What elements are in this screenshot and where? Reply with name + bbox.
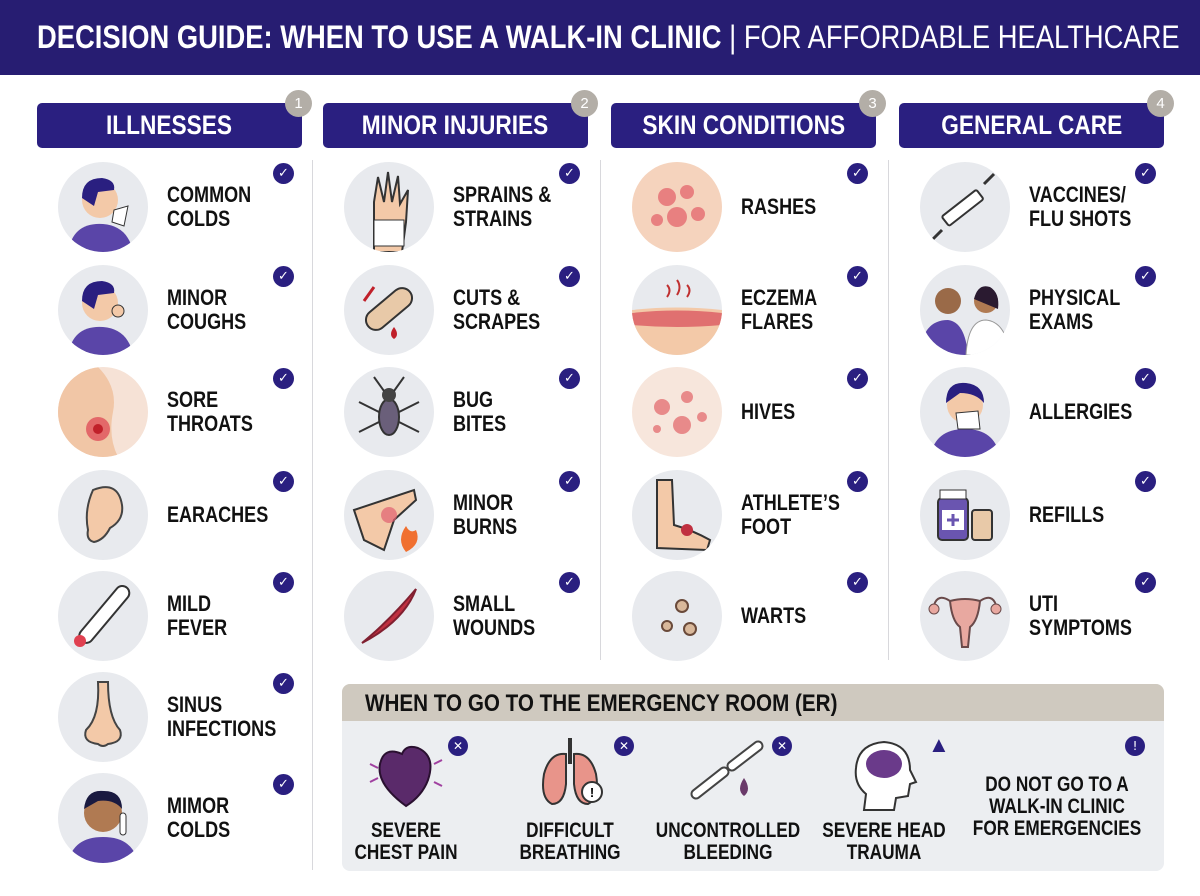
item: mild fever: FEVER [167, 615, 227, 640]
er item: uncontrolled bleeding [656, 736, 800, 864]
item: mimor colds: COLDS [167, 817, 230, 842]
panel: skin conditions [632, 162, 868, 661]
heading: er [342, 684, 1164, 721]
item: sinus infections [58, 672, 294, 762]
item: refills: ✓ [1140, 474, 1151, 489]
item: sore throats: SORE [167, 387, 218, 412]
item: sinus infections: ✓ [278, 676, 289, 691]
er item: difficult breathing: ✕ [619, 739, 629, 753]
item: hives: ✓ [852, 371, 863, 386]
header: illnesses: 1 [294, 95, 303, 112]
header: general care: GENERAL CARE [941, 110, 1122, 140]
er item: difficult breathing: BREATHING [519, 841, 621, 864]
item: minor burns [344, 470, 580, 560]
item: mimor colds: MIMOR [167, 793, 229, 818]
er item: uncontrolled bleeding: ✕ [777, 739, 787, 753]
item: common colds: COLDS [167, 206, 230, 231]
item: eczema flares: ✓ [852, 269, 863, 284]
item: small wounds [344, 571, 580, 661]
item: uti symptoms: UTI [1029, 591, 1058, 616]
item: warts [632, 571, 868, 661]
header: minor injuries: MINOR INJURIES [362, 110, 549, 140]
item: rashes: RASHES [741, 194, 816, 219]
item: allergies [920, 367, 1156, 457]
er item: severe head trauma: ▲ [928, 732, 950, 757]
item: refills: REFILLS [1029, 502, 1104, 527]
item: common colds: COMMON [167, 182, 251, 207]
header: illnesses [37, 103, 302, 148]
er note [973, 736, 1145, 840]
item: sore throats: THROATS [167, 411, 253, 436]
header: minor injuries: 2 [580, 95, 589, 112]
item: eczema flares: ECZEMA [741, 285, 817, 310]
item: hives: HIVES [741, 399, 795, 424]
item: small wounds: WOUNDS [453, 615, 535, 640]
item: cuts & scrapes: SCRAPES [453, 309, 540, 334]
header: skin conditions: 3 [868, 95, 877, 112]
item: uti symptoms: SYMPTOMS [1029, 615, 1132, 640]
er item: severe chest pain: SEVERE [371, 819, 441, 842]
item: vaccines: ✓ [1140, 166, 1151, 181]
er note: FOR EMERGENCIES [973, 817, 1141, 840]
item: sprains & strains [344, 162, 580, 252]
item: sprains & strains: SPRAINS & [453, 182, 551, 207]
heading: er: WHEN TO GO TO THE EMERGENCY ROOM (ER) [365, 690, 837, 717]
item: warts: WARTS [741, 603, 806, 628]
item: refills [920, 470, 1156, 560]
item: hives [632, 367, 868, 457]
header: illnesses: ILLNESSES [106, 110, 233, 140]
item: physical exams [920, 265, 1156, 355]
item: physical exams: ✓ [1140, 269, 1151, 284]
item: sore throats [58, 367, 294, 457]
item: minor burns: BURNS [453, 514, 517, 539]
er item: severe chest pain [354, 736, 468, 864]
item: eczema flares: FLARES [741, 309, 813, 334]
header: skin conditions: SKIN CONDITIONS [642, 110, 845, 140]
item: earaches: ✓ [278, 474, 289, 489]
item: bug bites [344, 367, 580, 457]
item: athlete's foot: FOOT [741, 514, 791, 539]
item: sprains & strains: ✓ [564, 166, 575, 181]
er item: severe chest pain: ✕ [453, 739, 463, 753]
item: minor coughs: ✓ [278, 269, 289, 284]
item: mild fever: MILD [167, 591, 211, 616]
panel: minor injuries [344, 162, 580, 661]
item: rashes: ✓ [852, 166, 863, 181]
item: small wounds: ✓ [564, 575, 575, 590]
item: athlete's foot [632, 470, 868, 560]
item: cuts & scrapes: ✓ [564, 269, 575, 284]
item: physical exams: PHYSICAL [1029, 285, 1120, 310]
er note: ! [1133, 739, 1137, 753]
item: sinus infections: SINUS [167, 692, 222, 717]
er item: difficult breathing: DIFFICULT [526, 819, 614, 842]
item: warts: ✓ [852, 575, 863, 590]
item: common colds [58, 162, 294, 252]
item: minor burns: MINOR [453, 490, 513, 515]
er note: DO NOT GO TO A [985, 773, 1129, 796]
item: vaccines: FLU SHOTS [1029, 206, 1131, 231]
item: athlete's foot: ✓ [852, 474, 863, 489]
item: sprains & strains: STRAINS [453, 206, 532, 231]
er item: uncontrolled bleeding: UNCONTROLLED [656, 819, 800, 842]
item: allergies: ✓ [1140, 371, 1151, 386]
item: minor coughs: COUGHS [167, 309, 246, 334]
er note: WALK-IN CLINIC [989, 795, 1125, 818]
item: vaccines: VACCINES/ [1029, 182, 1126, 207]
item: common colds: ✓ [278, 166, 289, 181]
er item: difficult breathing: ! [590, 785, 594, 800]
item: eczema flares [632, 265, 868, 355]
item: athlete's foot: ATHLETE’S [741, 490, 840, 515]
item: vaccines [920, 162, 1156, 252]
header: general care [899, 103, 1164, 148]
title [0, 0, 1200, 75]
item: small wounds: SMALL [453, 591, 515, 616]
header: skin conditions [611, 103, 876, 148]
item: mimor colds [58, 773, 294, 863]
item: earaches [58, 470, 294, 560]
header: general care: 4 [1156, 95, 1165, 112]
er item: severe head trauma: TRAUMA [847, 841, 921, 864]
item: allergies: ALLERGIES [1029, 399, 1132, 424]
item: mild fever [58, 571, 294, 661]
item: minor burns: ✓ [564, 474, 575, 489]
item: mild fever: ✓ [278, 575, 289, 590]
item: sore throats: ✓ [278, 371, 289, 386]
er item: severe head trauma [822, 732, 950, 864]
header: minor injuries [323, 103, 588, 148]
item: earaches: EARACHES [167, 502, 268, 527]
panel: emergency room [342, 684, 1164, 871]
item: physical exams: EXAMS [1029, 309, 1093, 334]
item: uti symptoms [920, 571, 1156, 661]
er item: severe head trauma: SEVERE HEAD [822, 819, 946, 842]
item: minor coughs [58, 265, 294, 355]
item: rashes [632, 162, 868, 252]
item: cuts & scrapes: CUTS & [453, 285, 520, 310]
item: minor coughs: MINOR [167, 285, 227, 310]
item: cuts & scrapes [344, 265, 580, 355]
item: bug bites: BUG [453, 387, 493, 412]
item: uti symptoms: ✓ [1140, 575, 1151, 590]
item: bug bites: BITES [453, 411, 506, 436]
panel: general care [920, 162, 1156, 661]
er item: uncontrolled bleeding: BLEEDING [684, 841, 772, 864]
panel: illnesses [58, 162, 294, 863]
item: sinus infections: INFECTIONS [167, 716, 276, 741]
item: bug bites: ✓ [564, 371, 575, 386]
er item: difficult breathing [519, 736, 634, 864]
item: mimor colds: ✓ [278, 777, 289, 792]
er item: severe chest pain: CHEST PAIN [354, 841, 458, 864]
title: DECISION GUIDE: WHEN TO USE A WALK-IN CLINIC | FOR AFFORDABLE HEALTHCARE [37, 19, 1180, 55]
